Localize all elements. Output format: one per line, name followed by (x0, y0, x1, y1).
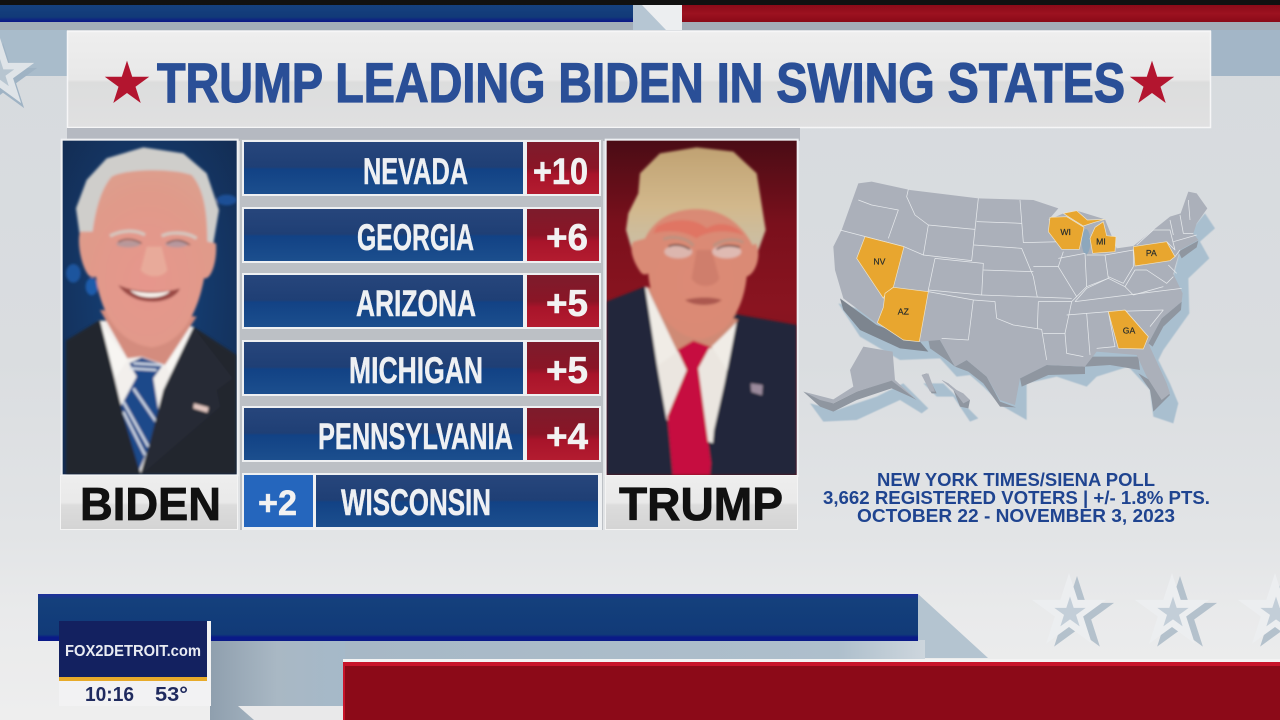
row: Pennsylvania (243, 407, 600, 461)
portrait figure (607, 147, 797, 475)
blue bar (38, 594, 918, 641)
row: Georgia: GEORGIA (357, 217, 474, 258)
row: Michigan (243, 341, 600, 395)
station logo bug (59, 621, 211, 706)
portrait figure (66, 147, 237, 474)
state labels: PA (1146, 248, 1157, 258)
row: Wisconsin (242, 473, 602, 530)
poll source text: OCTOBER 22 - NOVEMBER 3, 2023 (857, 505, 1175, 526)
poll source text: NEW YORK TIMES/SIENA POLL (877, 469, 1155, 490)
state: Nevada (857, 237, 904, 298)
label: Trump: TRUMP (619, 478, 783, 530)
state labels: GA (1123, 325, 1135, 335)
decorative stars (1032, 573, 1280, 647)
row: Pennsylvania: +4 (546, 416, 588, 457)
panel: Biden portrait (61, 139, 239, 476)
map: United States with swing states (803, 182, 1215, 423)
icon: left red star (105, 61, 149, 103)
row: Michigan: +5 (546, 350, 588, 391)
title banner (68, 32, 1210, 128)
state: Wisconsin (1048, 217, 1084, 249)
row: Arizona: +5 (546, 283, 588, 324)
state: Michigan (1063, 211, 1116, 253)
Hawaii (922, 373, 970, 403)
row: Pennsylvania: PENNSYLVANIA (318, 416, 513, 457)
star 2 (1135, 573, 1217, 647)
panel: Trump portrait (605, 139, 799, 477)
row: Wisconsin: WISCONSIN (341, 482, 491, 523)
portrait background (607, 141, 797, 475)
row: Nevada (243, 141, 600, 195)
state labels (873, 227, 1157, 335)
row: Michigan: MICHIGAN (349, 350, 483, 391)
star 1 (1032, 573, 1114, 647)
portrait background (63, 141, 237, 474)
row: Nevada: NEVADA (363, 151, 468, 192)
station name: FOX2DETROIT.com (65, 643, 201, 660)
icon: right red star (1130, 61, 1174, 103)
label: Biden: BIDEN (80, 478, 221, 530)
row: Georgia (243, 208, 600, 262)
state labels: AZ (898, 307, 910, 317)
state borders (840, 189, 1197, 360)
panel backing (67, 128, 800, 141)
state labels: NV (873, 257, 886, 267)
Lake Michigan (1082, 229, 1090, 254)
state labels: MI (1096, 237, 1106, 247)
poll source text: 3,662 REGISTERED VOTERS | +/- 1.8% PTS. (823, 487, 1210, 508)
row: Nevada: +10 (533, 151, 588, 192)
state: Arizona (877, 287, 928, 342)
map land (833, 182, 1207, 405)
row: Arizona: ARIZONA (356, 283, 476, 324)
red bar (343, 659, 1280, 720)
temperature: 53° (155, 684, 188, 706)
row: Wisconsin: +2 (258, 484, 297, 523)
panel: poll rows backing (240, 139, 603, 530)
row: Georgia: +6 (546, 217, 588, 258)
lower shadow shapes (210, 640, 925, 720)
top bars (0, 0, 1280, 30)
poll source text (823, 469, 1210, 526)
highlighted swing states (857, 211, 1175, 349)
map extrusion (803, 241, 1198, 412)
Alaska (803, 347, 917, 403)
state: Georgia (1108, 310, 1148, 349)
row: Arizona (243, 274, 600, 328)
state: Pennsylvania (1133, 242, 1175, 266)
state labels: WI (1060, 227, 1071, 237)
time: 10:16 (85, 684, 134, 706)
decorative star left (0, 38, 37, 108)
map shadow (810, 213, 1215, 423)
star 3 (1238, 573, 1280, 647)
